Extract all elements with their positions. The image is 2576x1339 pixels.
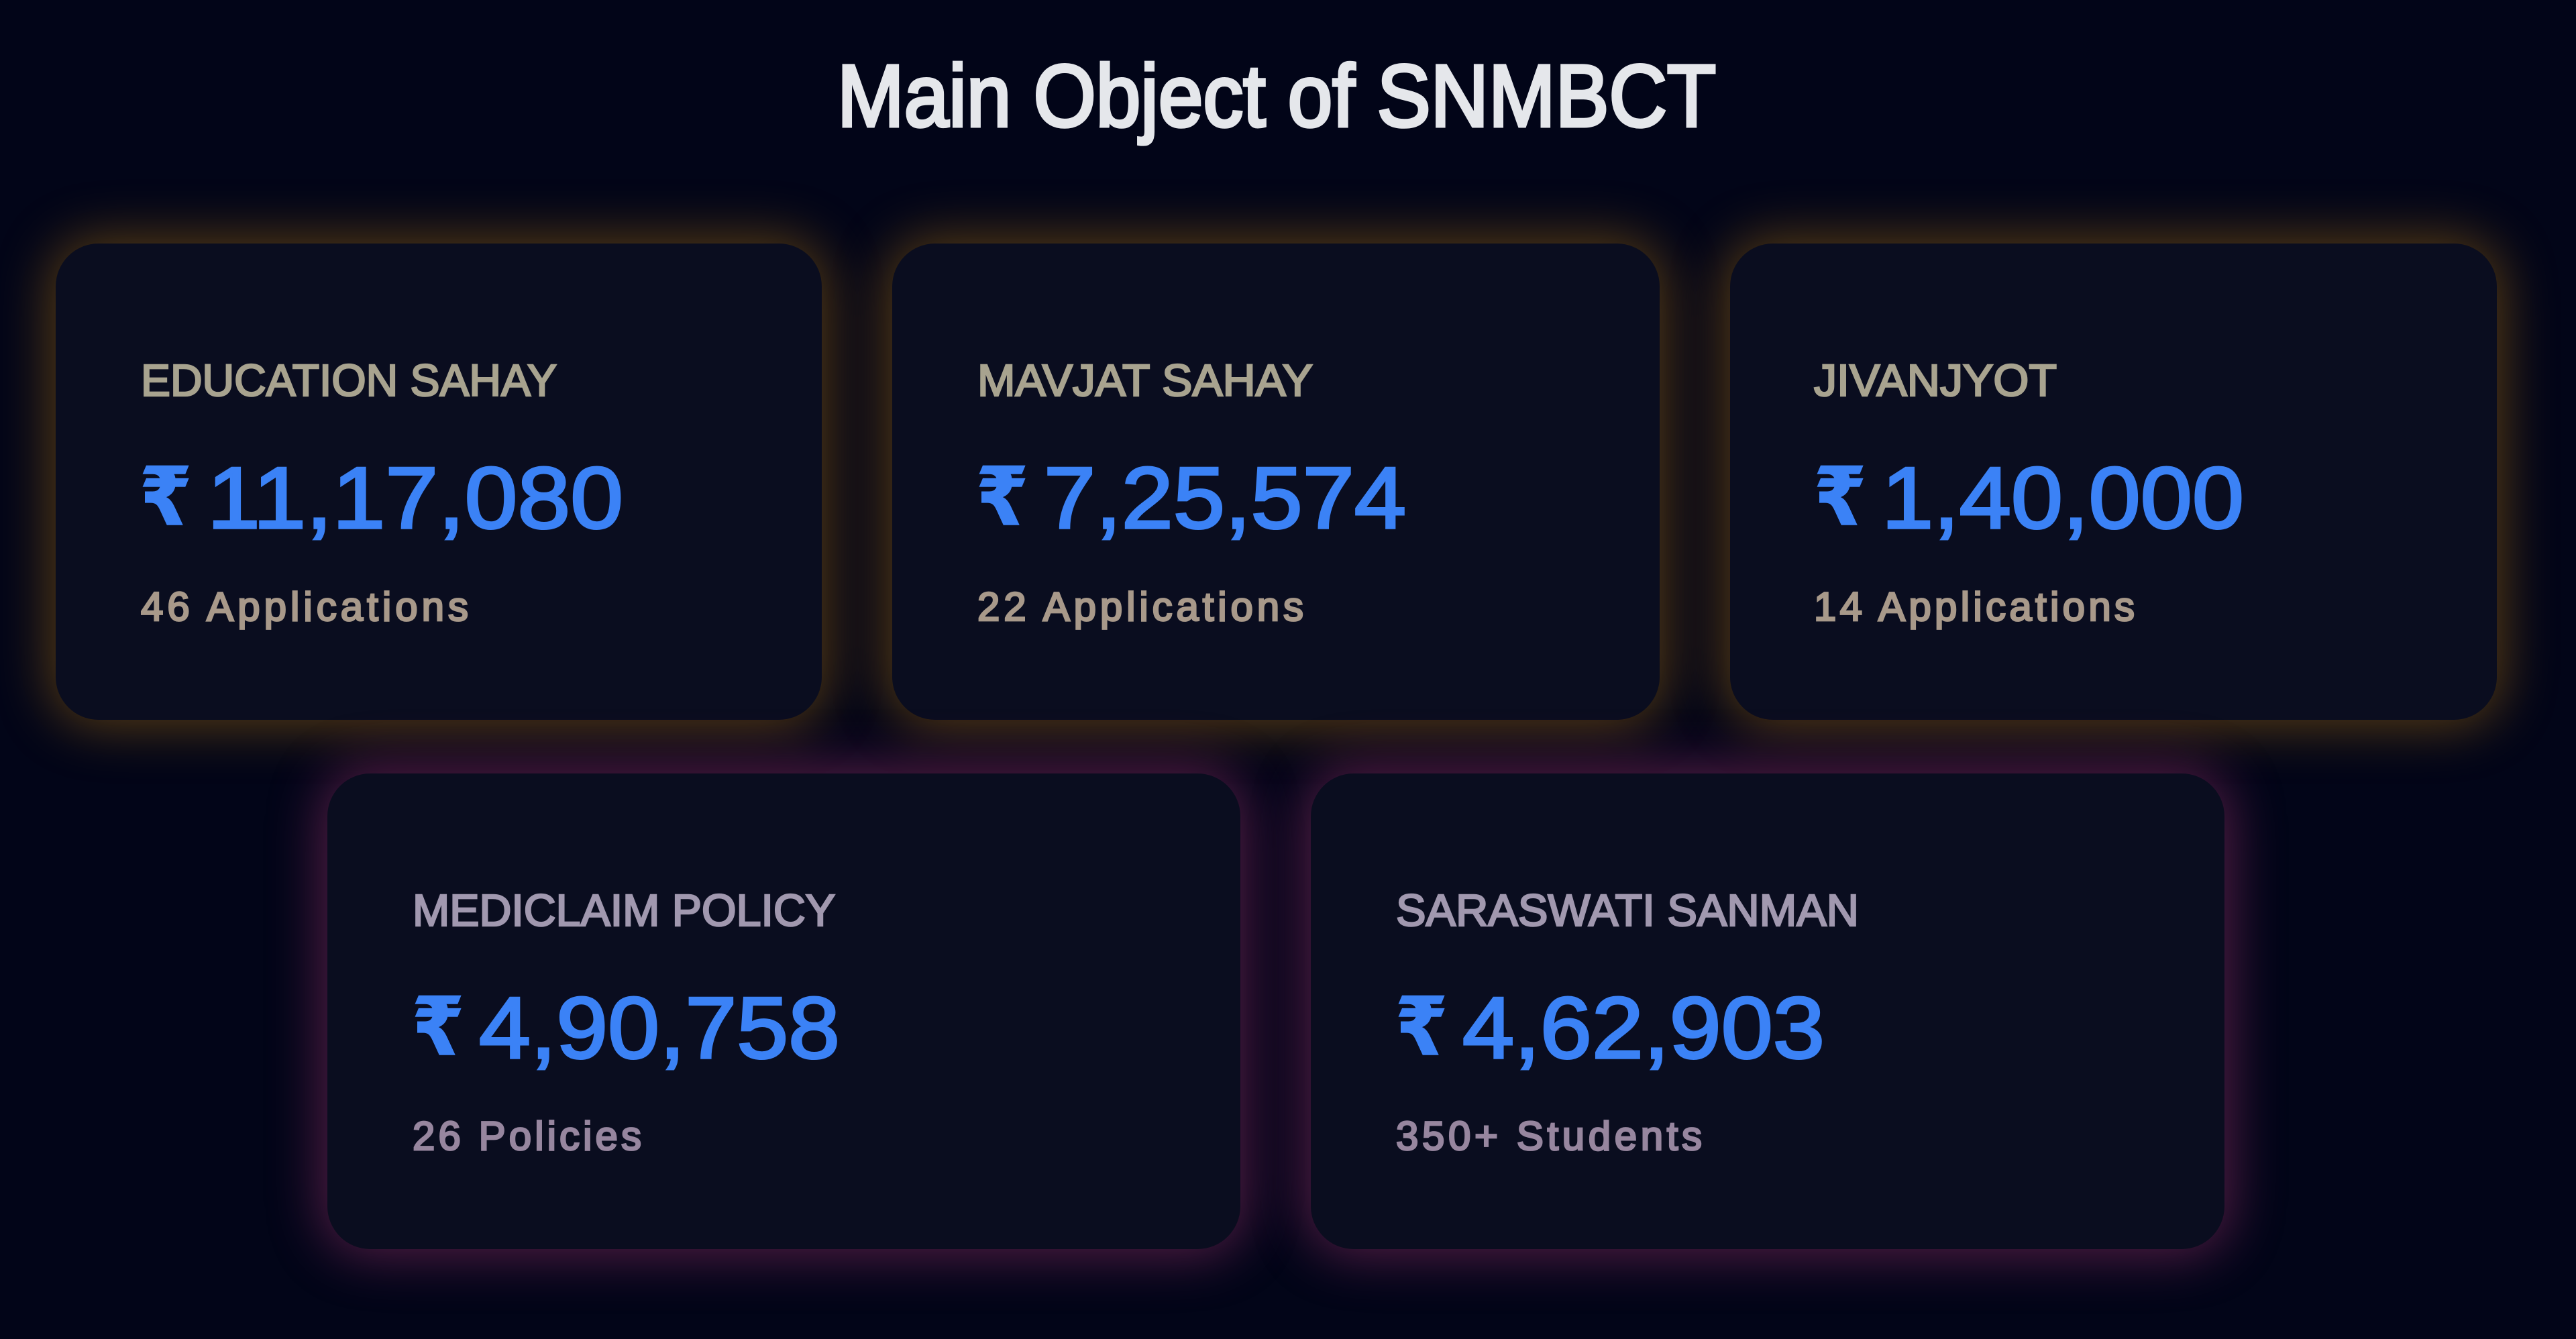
amount: 4,90,758 bbox=[479, 979, 840, 1077]
label: saraswati sanman: SARASWATI SANMAN bbox=[1396, 886, 1859, 936]
icon: rupee sign: ₹ bbox=[1395, 981, 1448, 1074]
label: jivanjyot: JIVANJYOT bbox=[1814, 356, 2057, 406]
application count: 46 Applications bbox=[141, 584, 468, 629]
panel: mavjat sahay bbox=[892, 244, 1660, 720]
policy count: 26 Policies bbox=[413, 1114, 641, 1159]
icon: rupee sign: ₹ bbox=[412, 981, 464, 1074]
title: Main Object of SNMBCT bbox=[837, 46, 1716, 145]
student count: 350+ Students bbox=[1396, 1114, 1702, 1159]
label: mavjat sahay: MAVJAT SAHAY bbox=[977, 356, 1313, 406]
panel: mediclaim policy bbox=[327, 773, 1240, 1249]
amount: 4,62,903 bbox=[1462, 979, 1825, 1077]
label: mediclaim policy: MEDICLAIM POLICY bbox=[413, 886, 835, 936]
panel: saraswati sanman bbox=[1311, 773, 2224, 1249]
application count: 14 Applications bbox=[1814, 584, 2135, 629]
label: education sahay: EDUCATION SAHAY bbox=[141, 356, 557, 406]
amount: 1,40,000 bbox=[1882, 449, 2244, 547]
icon: rupee sign: ₹ bbox=[1814, 451, 1866, 544]
icon: rupee sign: ₹ bbox=[140, 451, 192, 544]
panel: jivanjyot bbox=[1730, 244, 2497, 720]
panel: education sahay bbox=[56, 244, 822, 720]
amount: 11,17,080 bbox=[207, 449, 623, 547]
amount: 7,25,574 bbox=[1044, 449, 1406, 547]
application count: 22 Applications bbox=[977, 584, 1303, 629]
icon: rupee sign: ₹ bbox=[976, 451, 1028, 544]
